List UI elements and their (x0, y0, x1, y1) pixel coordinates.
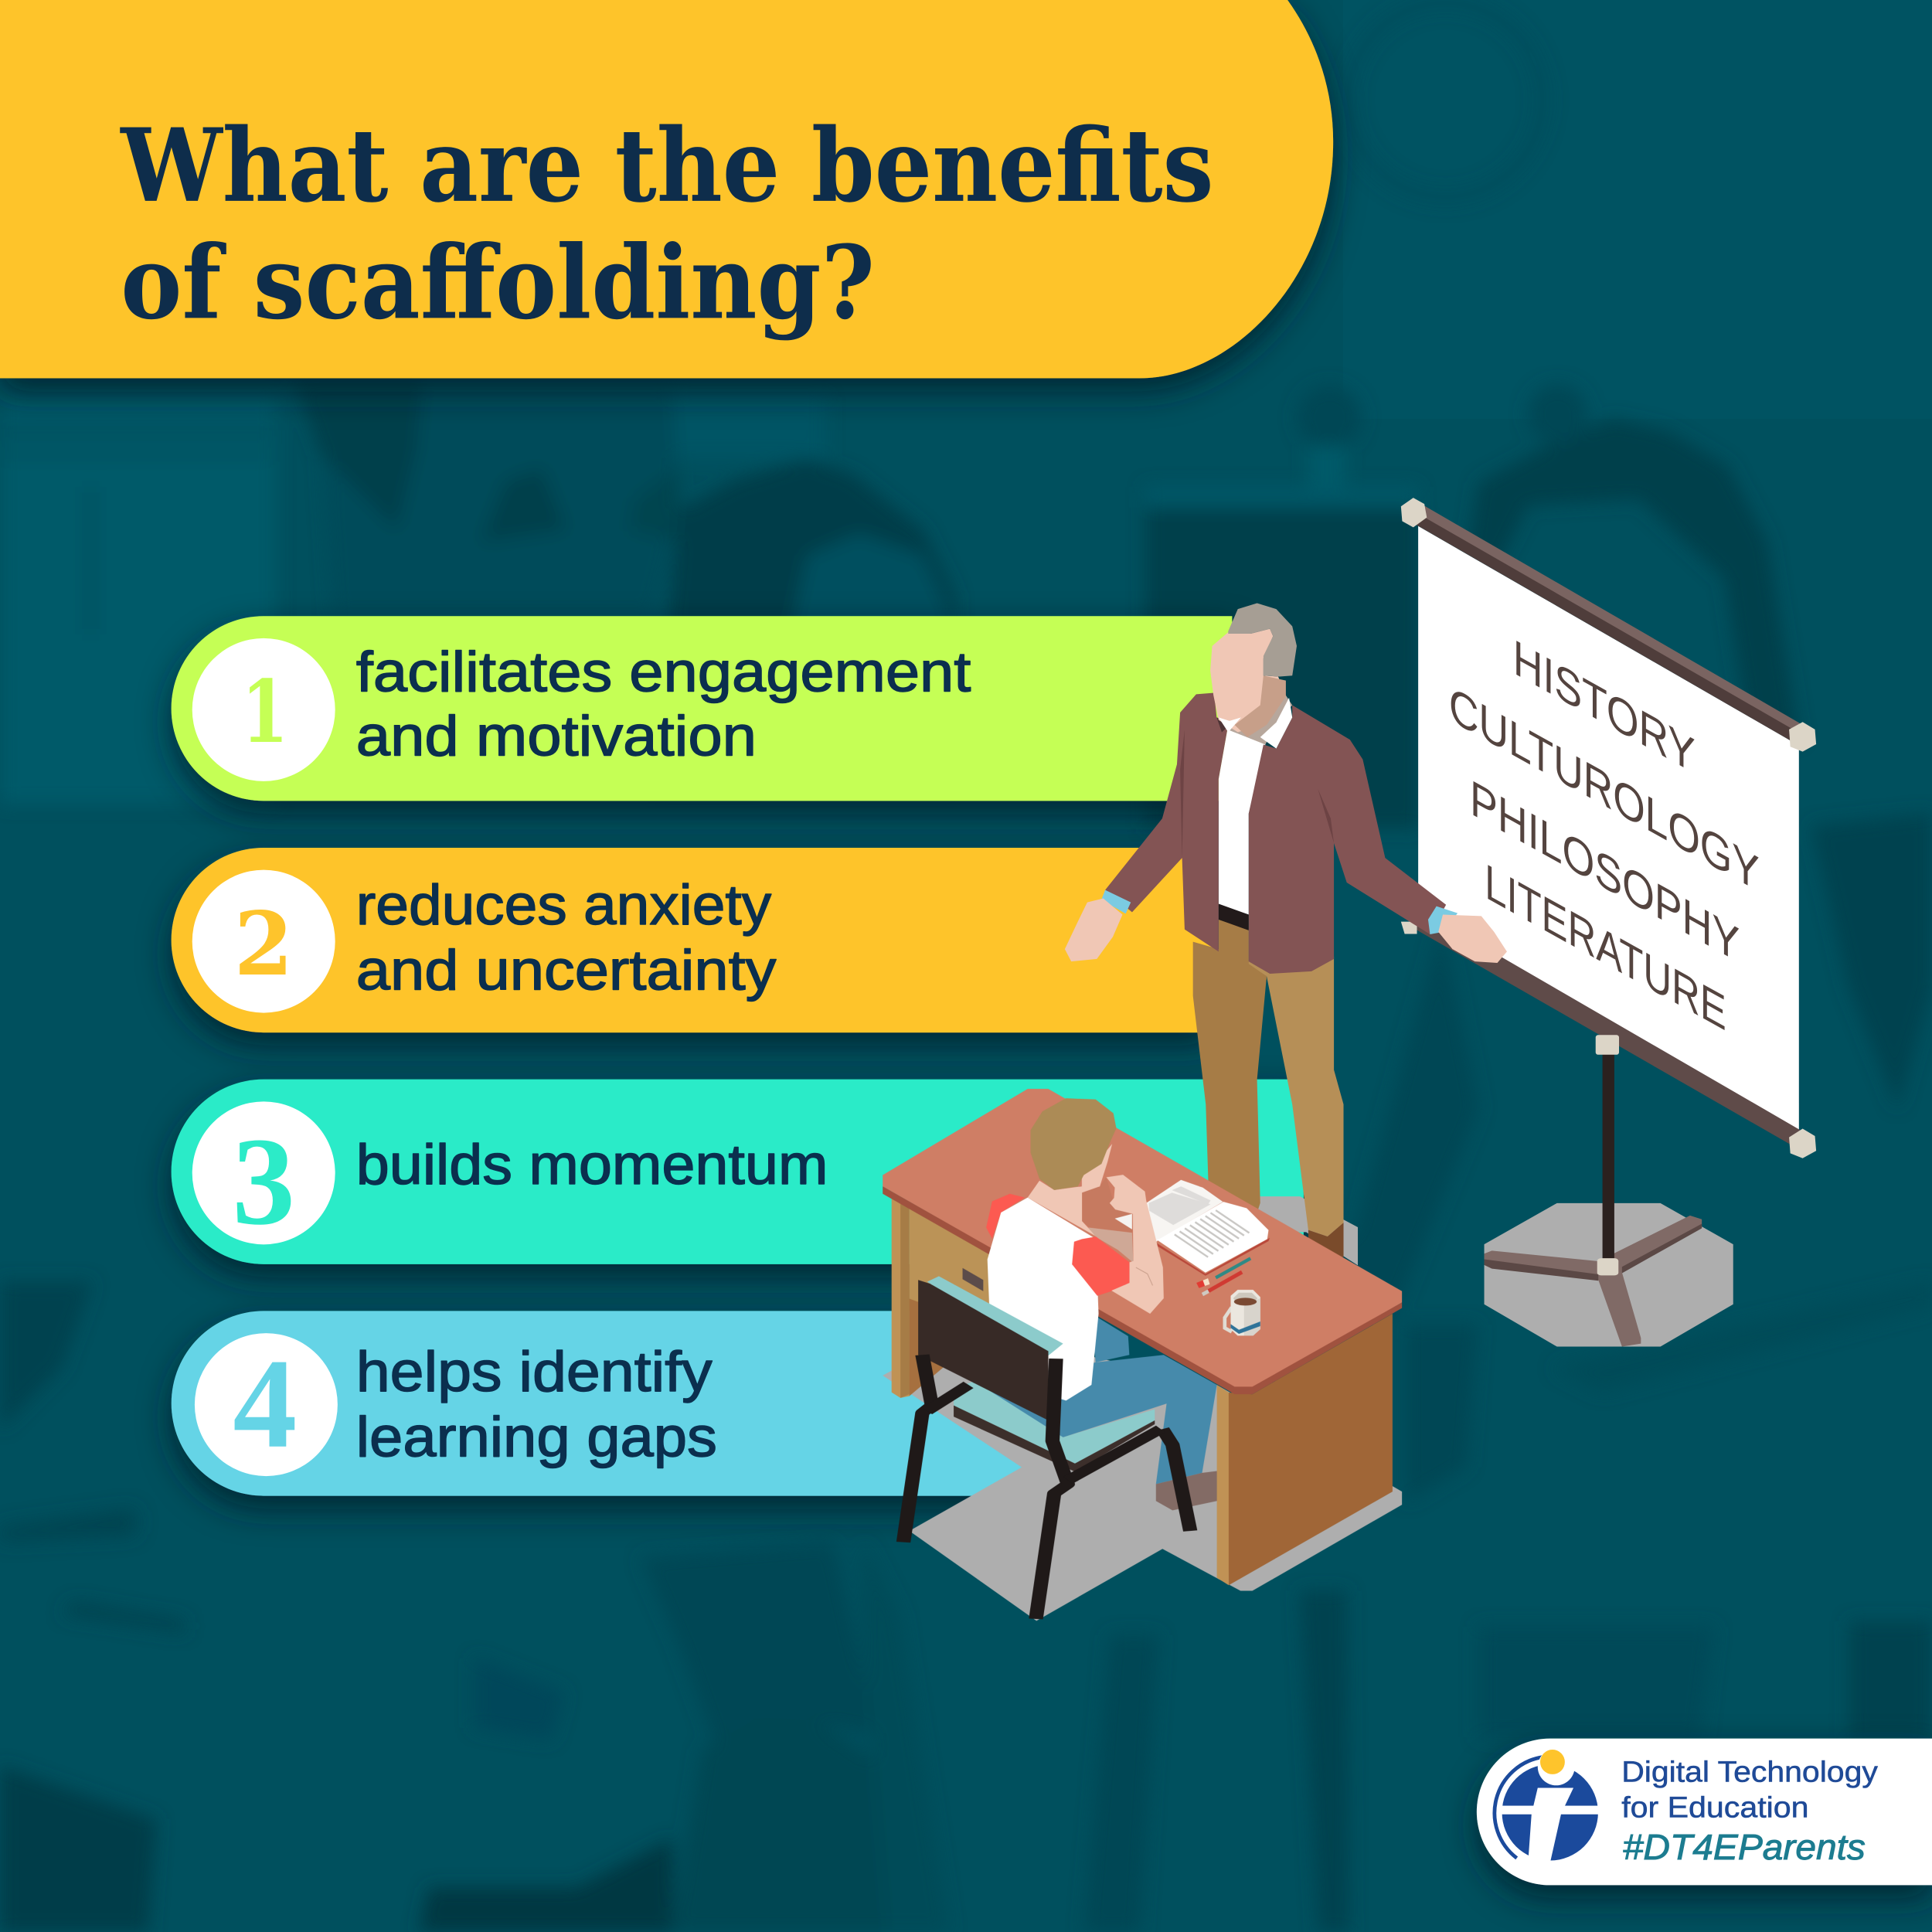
logo text: #DT4EParents (1623, 1827, 1866, 1867)
student arm and face (1072, 1144, 1164, 1314)
teacher figure (1065, 603, 1507, 1257)
number badge 4: 4 (233, 1332, 297, 1475)
hands and cuffs (1065, 890, 1507, 963)
logo mark (1495, 1748, 1600, 1866)
benefit 3 text: builds momentum (356, 1133, 828, 1196)
benefit 4 text: helps identify (356, 1340, 713, 1403)
student shirt (986, 1194, 1099, 1400)
student trousers (989, 1314, 1217, 1484)
logo text (1621, 1755, 1879, 1867)
top roller (1412, 502, 1806, 746)
number badge 3: 3 (233, 1112, 295, 1251)
number badge 1: 1 (241, 662, 288, 763)
shirt (1219, 725, 1265, 915)
number badge 3 (192, 1101, 335, 1251)
desk (883, 1089, 1402, 1585)
title banner (0, 0, 1333, 378)
pencils and eraser (1196, 1258, 1250, 1294)
benefit 1 pill (172, 616, 1232, 801)
student hair and chair (903, 1098, 1190, 1619)
benefit 4 pill (172, 1311, 1060, 1496)
benefit 2 text: and uncertainty (356, 938, 777, 1002)
floor tile (883, 1328, 1402, 1621)
benefit 2 text: reduces anxiety (356, 873, 771, 937)
screen subject list: PHILOSOPHY (1470, 769, 1740, 974)
shadow behind arm (1082, 1177, 1132, 1233)
projector screen (1401, 498, 1816, 1158)
bottom roller (1411, 908, 1806, 1151)
screen subject list: HISTORY (1513, 628, 1696, 784)
student hair (1031, 1098, 1117, 1190)
number badge 2 (192, 870, 335, 1013)
projector stand (1485, 1044, 1733, 1346)
student body (986, 1181, 1217, 1510)
logo badge (1477, 1739, 1932, 1885)
logo text: Digital Technology (1621, 1755, 1879, 1788)
desk and floor (883, 1089, 1402, 1621)
number badge 4 (195, 1332, 338, 1476)
trousers (1193, 920, 1344, 1257)
coffee mug (1225, 1290, 1260, 1335)
screen subject list: CULTUROLOGY (1449, 675, 1760, 903)
chair (903, 1276, 1190, 1619)
number badge 2: 2 (234, 893, 293, 995)
open book (1115, 1180, 1270, 1276)
student neck (1028, 1181, 1096, 1236)
screen subject list (1449, 628, 1760, 1042)
benefit 4 text: learning gaps (356, 1406, 717, 1469)
logo text: for Education (1621, 1791, 1809, 1825)
benefit 2 pill (172, 848, 1213, 1032)
number badge 1 (192, 638, 335, 781)
student shoe (1156, 1471, 1217, 1510)
desk items (1082, 1177, 1270, 1335)
benefit 1 text: facilitates engagement (356, 640, 971, 703)
neck and head (1210, 603, 1297, 749)
benefit 1 text: and motivation (356, 704, 757, 767)
jacket (1105, 693, 1446, 974)
teacher floor shadow (1254, 1196, 1358, 1265)
belt (1219, 903, 1249, 930)
title text: What are the benefits (119, 106, 1213, 225)
title text: of scaffolding? (121, 223, 875, 342)
roller caps (1401, 498, 1816, 1158)
benefit 3 pill (172, 1080, 1304, 1264)
screen subject list: LITERATURE (1485, 852, 1726, 1042)
